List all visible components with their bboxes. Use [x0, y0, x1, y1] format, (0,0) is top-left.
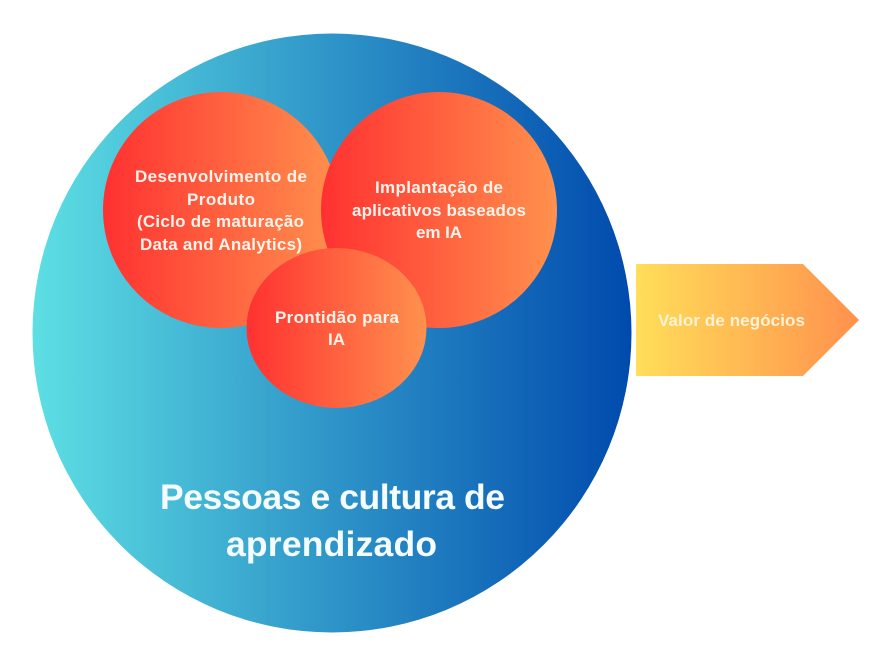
text: product development: Desenvolvimento de — [135, 167, 307, 186]
heading: people and learning culture: aprendizado — [226, 524, 437, 564]
text: AI application deployment — [352, 178, 526, 242]
text: AI application deployment: em IA — [416, 223, 462, 242]
text: product development: Data and Analytics) — [140, 235, 302, 254]
text: AI readiness: Prontidão para — [275, 308, 400, 327]
text: AI application deployment: Implantação de — [375, 178, 503, 197]
text: business value: Valor de negócios — [658, 311, 805, 330]
heading: people and learning culture: Pessoas e cultura de — [160, 477, 505, 517]
panel: large circle, people and learning culture — [32, 34, 632, 632]
text: product development: Produto — [187, 190, 255, 209]
text: AI readiness — [275, 308, 400, 349]
circle: AI application deployment — [321, 92, 557, 328]
circle: product development — [103, 92, 339, 328]
text: AI application deployment: aplicativos baseados — [352, 201, 526, 220]
text: AI readiness: IA — [328, 330, 345, 349]
arrow: business value — [636, 264, 859, 376]
circle: AI readiness — [246, 248, 426, 408]
text: product development — [135, 167, 307, 254]
heading: people and learning culture — [160, 477, 505, 564]
text: product development: (Ciclo de maturação — [137, 212, 304, 231]
